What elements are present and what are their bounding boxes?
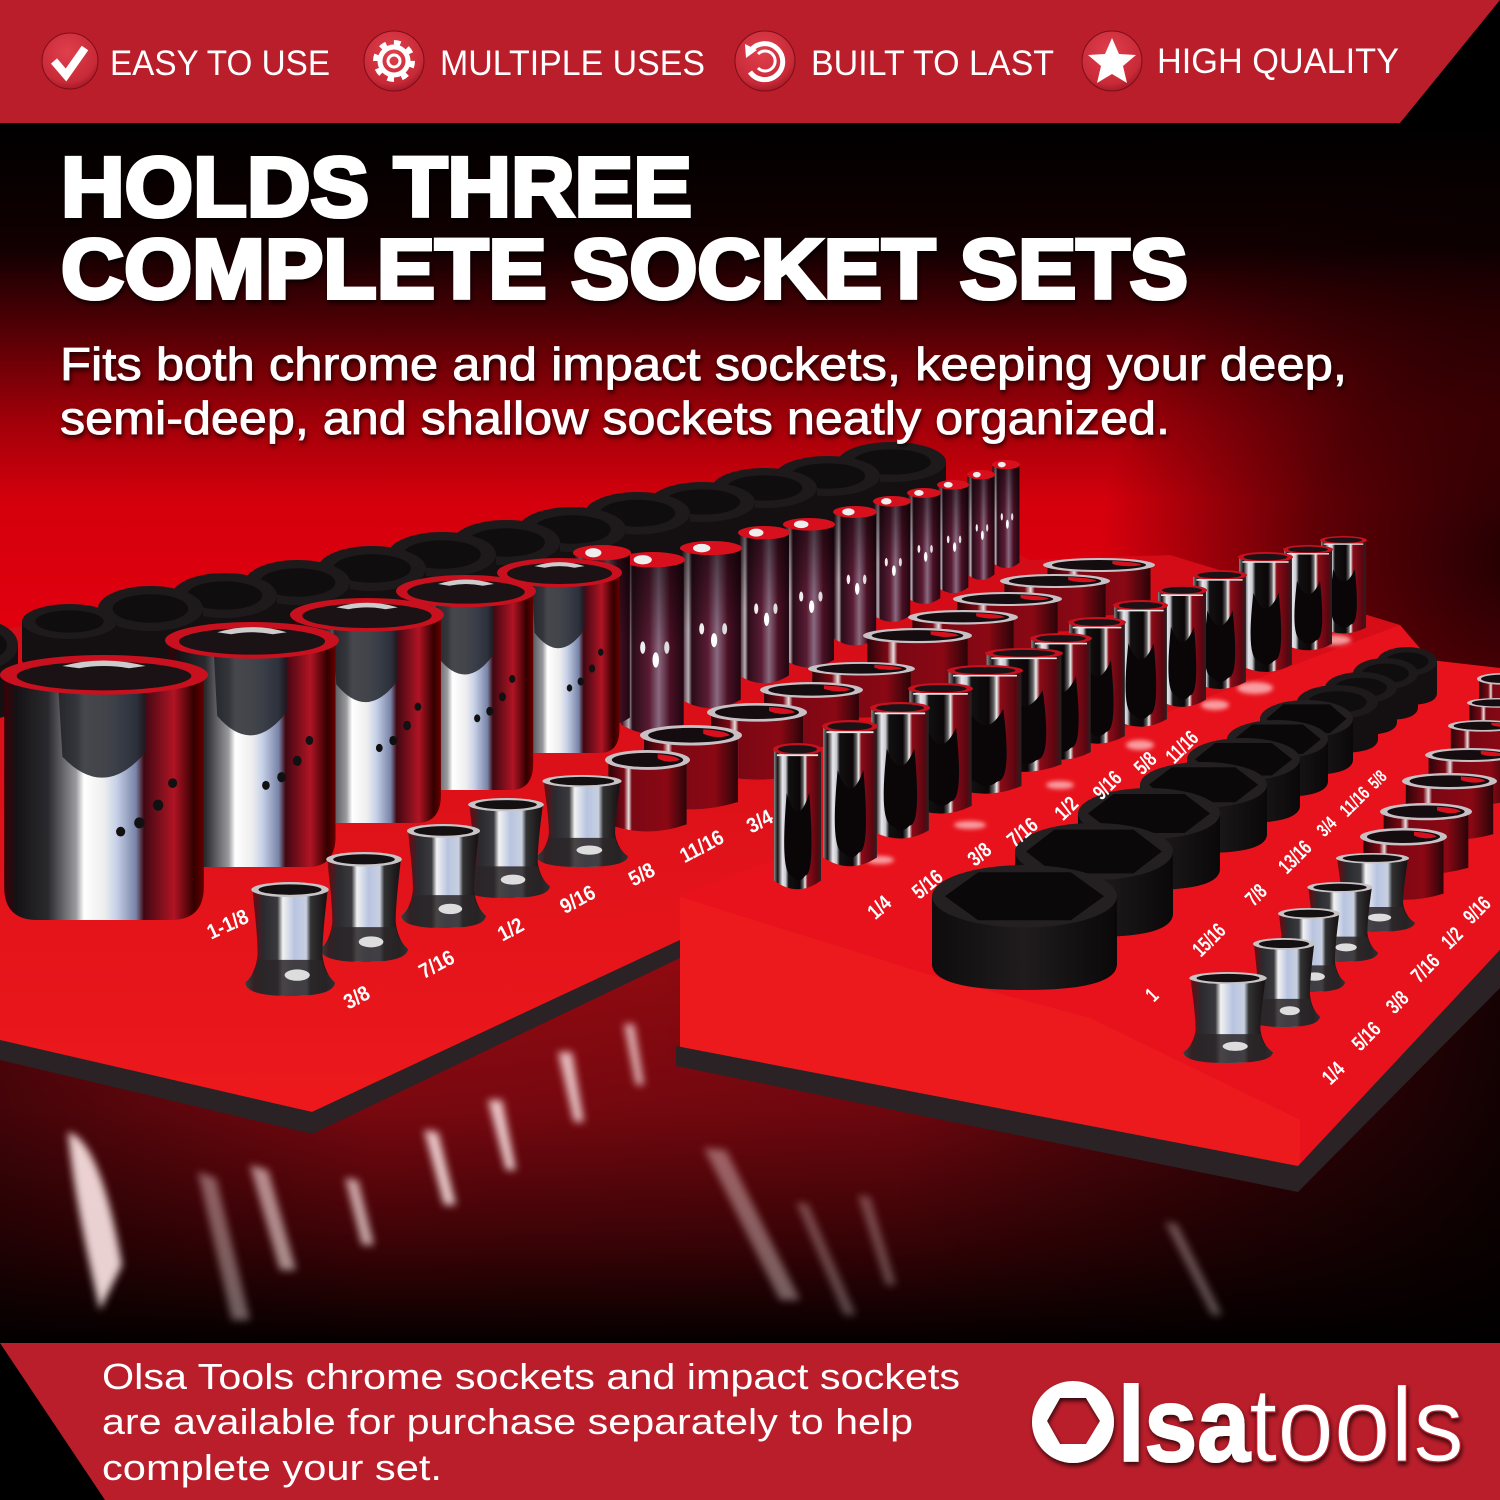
label: easy to use: EASY TO USE bbox=[110, 44, 330, 83]
icon: refresh badge bbox=[735, 31, 795, 91]
label: multiple uses: MULTIPLE USES bbox=[440, 44, 705, 83]
chrome deep sockets row bbox=[773, 536, 1367, 889]
right tray size labels: 1/2 bbox=[1051, 793, 1083, 825]
left tray size labels bbox=[204, 806, 777, 1014]
right tray size labels: 7/16 bbox=[1003, 814, 1043, 852]
right tray size labels: 15/16 bbox=[1188, 919, 1230, 961]
tray gloss highlights bbox=[866, 635, 1351, 864]
right tray size labels: 1/2 bbox=[1437, 923, 1467, 953]
left tray size labels: 3/8 bbox=[340, 982, 374, 1014]
right tray size labels: 1/4 bbox=[1317, 1056, 1350, 1089]
logo: Olsatools bbox=[1032, 1366, 1464, 1484]
right tray size labels: 3/4 bbox=[1313, 813, 1341, 841]
shallow chrome sockets, back row bbox=[605, 558, 1155, 831]
reflective floor bbox=[0, 950, 1500, 1343]
headline bbox=[61, 140, 1188, 316]
right tray size labels: 9/16 bbox=[1088, 766, 1126, 804]
availability note: complete your set. bbox=[102, 1447, 442, 1488]
right tray size labels: 5/16 bbox=[1347, 1017, 1385, 1055]
icon: check badge bbox=[42, 33, 98, 89]
background: dark right side bbox=[1000, 140, 1500, 1000]
right tray size labels: 3/8 bbox=[1381, 986, 1413, 1018]
small chrome sockets row bbox=[1183, 673, 1500, 1063]
left tray size labels: 7/16 bbox=[415, 946, 459, 984]
black impact sockets row bbox=[932, 647, 1437, 990]
right tray size labels: 7/8 bbox=[1241, 880, 1271, 910]
right tray size labels: 1/4 bbox=[864, 891, 897, 924]
subheading: semi-deep, and shallow sockets neatly organized. bbox=[60, 392, 1170, 444]
far chrome sockets bbox=[573, 460, 1020, 737]
right tray size labels: 13/16 bbox=[1274, 836, 1316, 878]
icon: star badge bbox=[1082, 31, 1142, 91]
floor reflections bbox=[68, 1024, 1222, 1320]
left tray size labels: 9/16 bbox=[556, 881, 600, 919]
right tray size labels: 5/8 bbox=[1129, 747, 1161, 779]
left tray size labels: 5/8 bbox=[625, 859, 659, 891]
headline: COMPLETE SOCKET SETS bbox=[61, 222, 1188, 316]
right tray size labels: 1 bbox=[1141, 984, 1163, 1006]
right tray size labels: 5/8 bbox=[1365, 767, 1391, 793]
logo: Olsatools: tools bbox=[1249, 1366, 1464, 1484]
left tray foam base bbox=[0, 940, 680, 1134]
right tray size labels bbox=[864, 726, 1495, 1089]
right tray size labels: 5/16 bbox=[908, 866, 948, 904]
chrome sockets, small front row bbox=[245, 775, 628, 996]
top banner bbox=[0, 0, 1500, 123]
right tray foam base bbox=[676, 950, 1500, 1192]
left tray size labels: 1/2 bbox=[494, 914, 528, 946]
right tray size labels: 11/16 bbox=[1336, 783, 1374, 821]
right tray size labels: 11/16 bbox=[1161, 726, 1203, 768]
subheading: Fits both chrome and impact sockets, keeping your deep, bbox=[60, 338, 1347, 390]
left socket tray bbox=[0, 442, 1400, 1134]
icon: gear badge bbox=[364, 31, 424, 91]
right tray front face bbox=[680, 897, 1300, 1168]
availability note bbox=[102, 1356, 960, 1488]
black impact sockets, back row bbox=[0, 442, 946, 720]
availability note: are available for purchase separately to help bbox=[102, 1401, 913, 1442]
left tray size labels: 11/16 bbox=[676, 826, 728, 868]
right socket tray bbox=[676, 536, 1500, 1192]
left tray size labels: 3/4 bbox=[743, 806, 777, 838]
availability note: Olsa Tools chrome sockets and impact sockets bbox=[102, 1356, 960, 1397]
logo: Olsatools: lsa bbox=[1118, 1366, 1251, 1484]
label: built to last: BUILT TO LAST bbox=[811, 44, 1054, 83]
headline: HOLDS THREE bbox=[61, 140, 692, 234]
background: black to red backdrop bbox=[0, 123, 1500, 1023]
bottom banner bbox=[0, 1343, 1500, 1500]
right tray size labels: 3/8 bbox=[964, 839, 996, 871]
right tray size labels: 7/16 bbox=[1406, 949, 1444, 987]
left tray size labels: 1-1/8 bbox=[204, 905, 252, 945]
right tray size labels: 9/16 bbox=[1459, 892, 1495, 928]
subheading bbox=[60, 338, 1347, 444]
chrome sockets, large row bbox=[0, 558, 622, 920]
label: high quality: HIGH QUALITY bbox=[1157, 42, 1399, 81]
